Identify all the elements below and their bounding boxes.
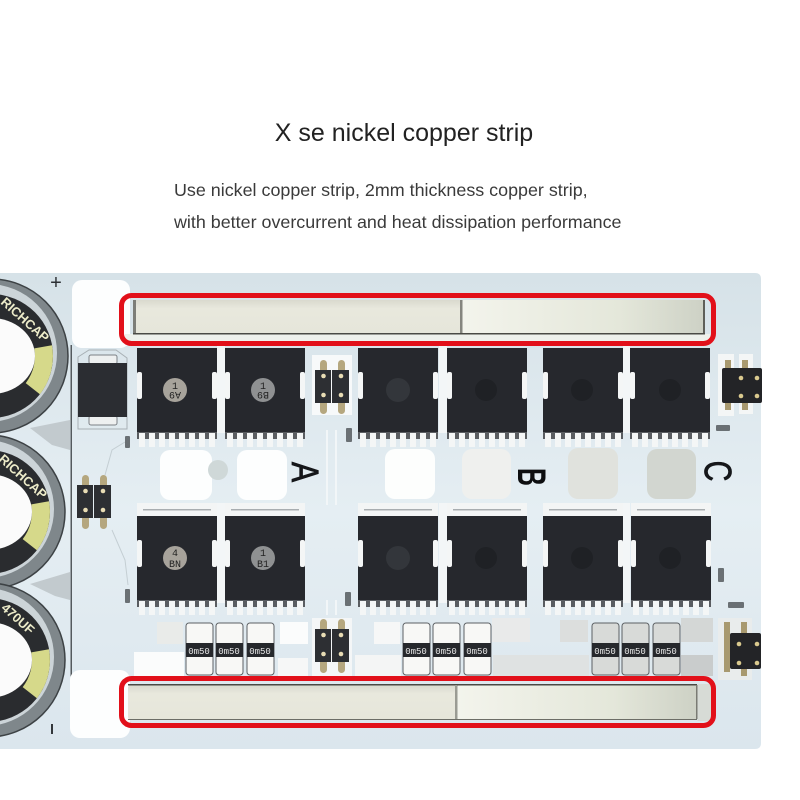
shunt resistors <box>186 623 680 675</box>
circuit board <box>0 272 762 749</box>
description text: Use nickel copper strip, 2mm thickness copper strip, <box>174 180 588 200</box>
capacitor column shading <box>30 420 70 600</box>
shunt resistors: 0m50 <box>655 647 677 657</box>
description text <box>173 180 622 232</box>
shunt resistors: 0m50 <box>405 647 427 657</box>
minus marker <box>51 724 53 734</box>
capacitor markings <box>0 294 52 637</box>
shunt resistors: 0m50 <box>249 647 271 657</box>
shunt resistors: 0m50 <box>624 647 646 657</box>
bottom copper strip left <box>128 684 457 720</box>
description text: with better overcurrent and heat dissipation performance <box>173 212 622 232</box>
top copper strip right <box>460 300 705 334</box>
bottom MOSFET row <box>137 503 711 615</box>
phase letter A: A <box>283 462 325 482</box>
bottom MOSFET row: B1 <box>257 560 269 571</box>
shunt resistors: 0m50 <box>594 647 616 657</box>
capacitor 2 <box>0 435 65 589</box>
top MOSFET row: B9 <box>257 388 269 399</box>
top copper strip left <box>133 300 462 334</box>
bottom-left solder pad <box>70 670 130 738</box>
red highlight: bottom strip <box>122 678 714 726</box>
top-left solder pad <box>72 280 130 348</box>
top MOSFET row: 1 <box>172 382 178 393</box>
small SMD parts <box>125 425 744 608</box>
pale band under top strip <box>125 334 710 341</box>
phase letter C: C <box>696 461 738 481</box>
bottom copper strip right <box>455 684 712 721</box>
capacitor 3 <box>0 583 65 737</box>
bottom MOSFET row: 1 <box>260 549 266 560</box>
top MOSFET row: A9 <box>169 388 181 399</box>
plus marker: + <box>50 272 62 294</box>
white strips between MOSFETs <box>217 345 630 603</box>
pin headers <box>77 354 762 680</box>
diode <box>78 350 127 429</box>
right top header <box>718 354 734 416</box>
capacitor 1 <box>0 279 68 433</box>
shunt resistors: 0m50 <box>466 647 488 657</box>
board substrate <box>0 273 761 749</box>
bottom MOSFET row: 4 <box>172 549 178 560</box>
right bottom header <box>718 618 752 680</box>
phase letter B: B <box>508 468 553 486</box>
bottom MOSFET row: BN <box>169 560 181 571</box>
MOSFET marks <box>163 378 187 402</box>
lower solder pads <box>134 618 713 676</box>
shunt resistors: 0m50 <box>218 647 240 657</box>
center trace <box>327 430 336 615</box>
shunt resistors: 0m50 <box>435 647 457 657</box>
board edge line beside capacitors <box>70 345 72 690</box>
top MOSFET row: 1 <box>260 382 266 393</box>
MOSFET marks <box>163 546 187 570</box>
fine traces <box>105 442 128 585</box>
title: X se nickel copper strip <box>275 119 533 147</box>
shunt resistors: 0m50 <box>188 647 210 657</box>
top MOSFET row <box>137 348 710 447</box>
middle solder pads <box>160 448 696 500</box>
red highlight: top strip <box>122 296 714 344</box>
